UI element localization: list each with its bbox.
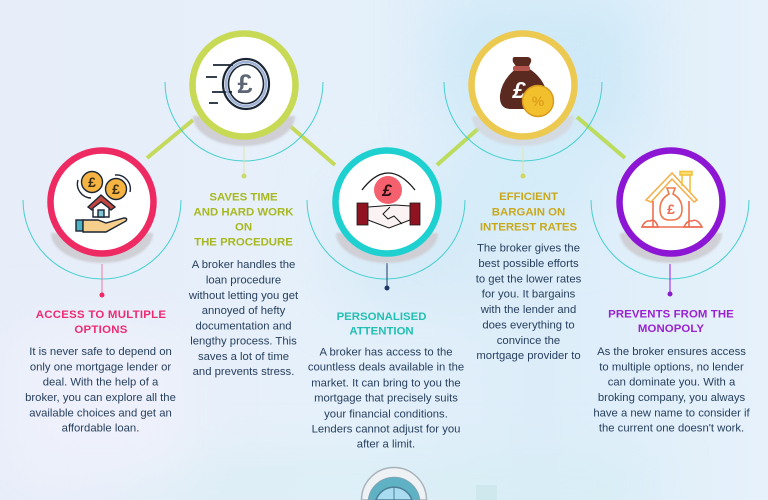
connector: time to attention (290, 126, 335, 165)
text: time: without letting you get (188, 290, 299, 302)
heading: time: SAVES TIME (209, 192, 278, 204)
text: monopoly: the current one doesn't work. (599, 423, 744, 435)
text: attention: mortgage that precisely suits (314, 393, 458, 405)
badge: bargain (472, 34, 574, 146)
icon: money bag and coin: £ (512, 77, 527, 103)
text: bargain: best possible efforts (478, 258, 579, 270)
text: bargain: does everything to (482, 320, 575, 332)
text: bargain: to get the lower rates (476, 274, 582, 286)
text: time: A broker handles the (192, 259, 295, 271)
text: attention: countless deals available in the (308, 362, 464, 374)
icon: coins, house and hand: £ (88, 174, 96, 190)
decorative arc and stem: attention (307, 200, 465, 290)
text: monopoly: have a new name to consider if (593, 407, 751, 419)
text: time: saves a lot of time (198, 351, 289, 363)
text: monopoly: As the broker ensures access (597, 346, 746, 358)
text: monopoly: can dominate you. With a (608, 377, 736, 389)
connector: options to time (147, 120, 193, 158)
text: options: affordable loan. (62, 423, 139, 435)
decorative arc and stem: options (23, 200, 181, 298)
text: options: only one mortgage lender or (30, 361, 171, 373)
heading: monopoly: MONOPOLY (638, 323, 704, 335)
icon: money bag and coin (500, 57, 554, 116)
text: time: documentation and (195, 320, 292, 332)
icon: handshake and pound: £ (381, 181, 392, 200)
text: options: available choices and get an (29, 407, 172, 419)
icon: coins, house and hand: £ (112, 181, 120, 197)
heading: bargain: INTEREST RATES (480, 222, 578, 234)
badge: options (50, 150, 154, 263)
badge: attention (336, 150, 438, 263)
panel: prevents monopoly (591, 150, 751, 435)
heading: bargain: EFFICIENT (499, 191, 558, 203)
text: time: lengthy process. This (190, 336, 297, 348)
text: options: broker, you can explore all the (25, 392, 176, 404)
heading: time: AND HARD WORK (194, 206, 294, 218)
text: time: and prevents stress. (193, 366, 294, 378)
heading: monopoly: PREVENTS FROM THE (608, 308, 734, 320)
heading: options: OPTIONS (74, 324, 128, 336)
text: bargain: for you. It bargains (482, 288, 576, 300)
icon: handshake and pound (357, 173, 420, 228)
badge: monopoly (620, 150, 722, 263)
text: time: annoyed of hefty (202, 305, 286, 317)
heading: time: ON (235, 222, 252, 234)
text: bargain: mortgage provider to (476, 350, 581, 362)
icon: money bag and coin: % (532, 93, 545, 109)
text: bargain: The broker gives the (477, 242, 580, 254)
decorative arc and stem: monopoly (591, 200, 749, 296)
text: time: loan procedure (206, 274, 281, 286)
icon: fast pound coin (206, 59, 269, 109)
heading: time: THE PROCEDURE (194, 236, 293, 248)
text: monopoly: to multiple options, no lender (599, 361, 744, 373)
panel: access to multiple options (23, 150, 181, 435)
panel: personalised attention (307, 150, 465, 451)
text: bargain: convince the (497, 335, 560, 347)
icon: window badge at bottom (362, 468, 426, 500)
text: bargain: with the lender and (480, 304, 576, 316)
text: attention: after a limit. (357, 439, 415, 451)
text: options: deal. With the help of a (43, 377, 159, 389)
decorative arc and stem: bargain (444, 82, 602, 178)
connector: attention to bargain (437, 128, 479, 165)
heading: bargain: BARGAIN ON (492, 206, 565, 218)
badge: time (192, 34, 296, 146)
heading: options: ACCESS TO MULTIPLE (36, 309, 166, 321)
decorative pale square (476, 485, 497, 500)
text: options: It is never safe to depend on (29, 346, 172, 358)
text: attention: your financial conditions. (324, 408, 448, 420)
text: attention: Lenders cannot adjust for you (312, 424, 460, 436)
panel: saves time (165, 34, 323, 378)
connector: bargain to monopoly (577, 117, 625, 158)
text: monopoly: broking company, you always (598, 392, 746, 404)
text: attention: A broker has access to the (319, 346, 453, 358)
icon: fast pound coin: £ (237, 69, 253, 99)
icon: house with money bag: £ (667, 201, 675, 217)
panel: efficient bargain (444, 34, 602, 362)
icon: coins, house and hand (76, 172, 130, 232)
heading: attention: ATTENTION (349, 326, 414, 338)
heading: attention: PERSONALISED (337, 311, 426, 323)
decorative arc and stem: time (165, 82, 323, 178)
icon: house with money bag (642, 172, 702, 227)
text: attention: market. It can bring to you the (311, 378, 461, 390)
